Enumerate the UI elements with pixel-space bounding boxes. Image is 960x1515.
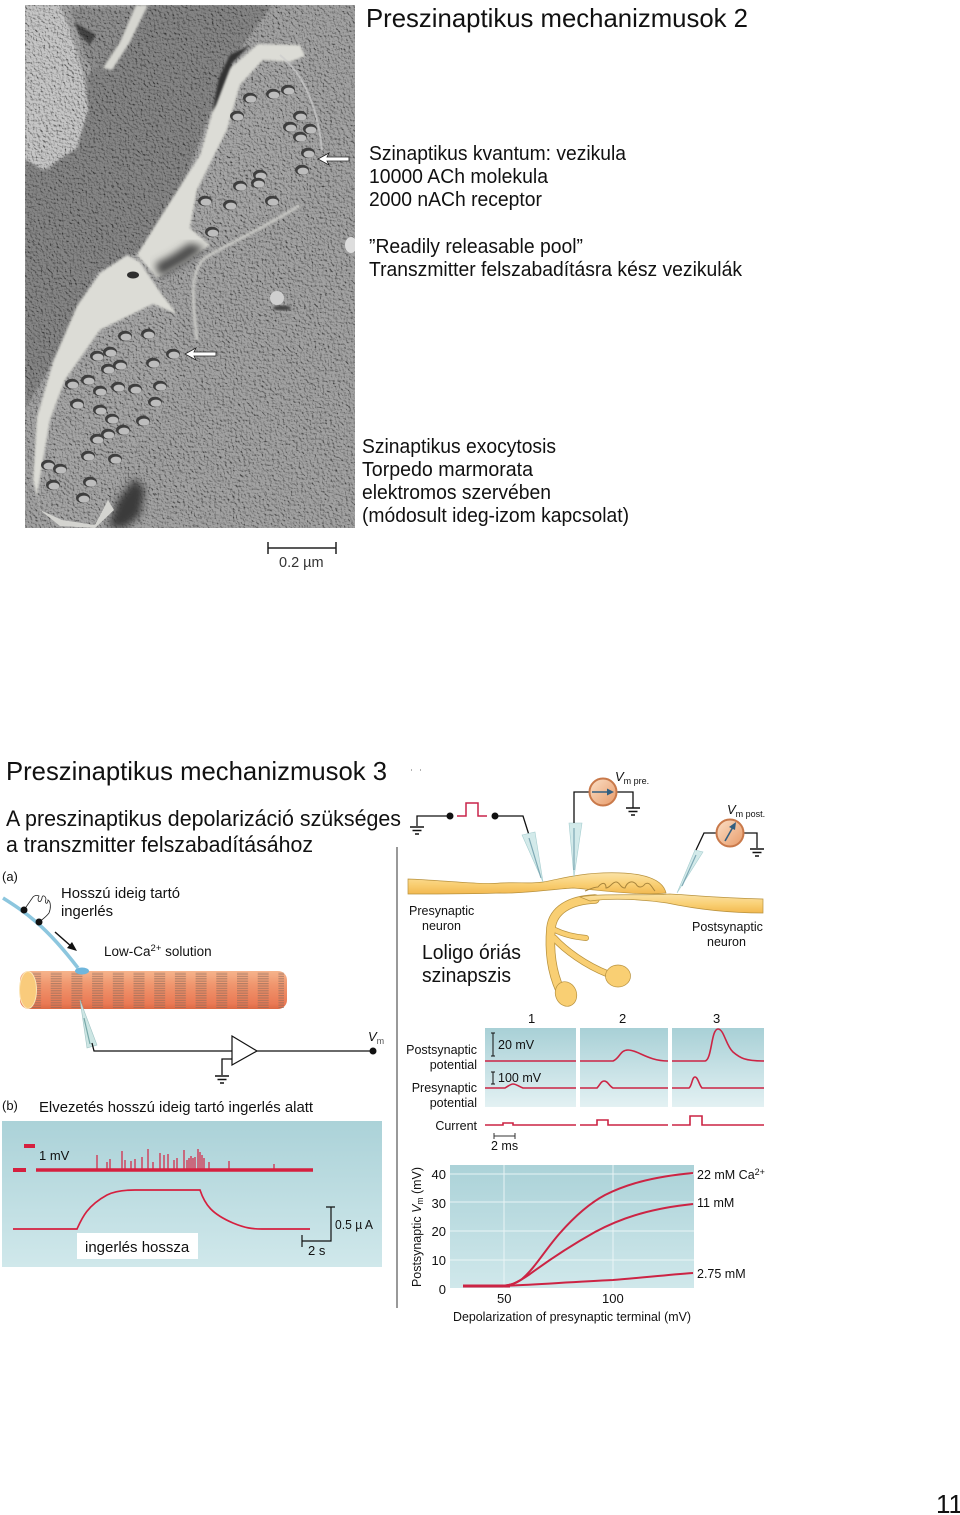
x ticks: 100 xyxy=(602,1291,624,1306)
amplifier circuit: V xyxy=(368,1029,377,1044)
panel b: recording during long stimulation xyxy=(2,1098,382,1267)
labels: neurons: Presynaptic xyxy=(409,904,474,918)
presynaptic voltmeter: m pre. xyxy=(624,776,649,786)
branches of postsynaptic neuron xyxy=(550,899,630,1009)
amplifier circuit: m xyxy=(377,1036,384,1046)
label: Loligo giant synapse: Loligo óriás xyxy=(422,942,521,964)
pipettes xyxy=(522,823,703,893)
y ticks: 30 xyxy=(432,1196,446,1211)
scale bars: 0.5 µ A xyxy=(335,1217,373,1232)
diagram: squid giant synapse xyxy=(408,769,765,1009)
row labels: potential xyxy=(430,1096,477,1110)
panel b: recording during long stimulation: Elvezetés hosszú ideig tartó ingerlés alatt xyxy=(39,1099,314,1116)
y axis label: Postsynaptic V xyxy=(409,1204,424,1287)
x ticks: 50 xyxy=(497,1291,511,1306)
label: low calcium solution: solution xyxy=(161,944,212,959)
pale upper-left cell xyxy=(25,5,88,170)
arrow: upper vesicle xyxy=(318,153,349,165)
column numbers xyxy=(528,1011,720,1026)
y ticks: 40 xyxy=(432,1167,446,1182)
curve labels: 2.75 mM xyxy=(697,1267,746,1281)
scale bar 0.2 um xyxy=(268,542,336,571)
y ticks: 20 xyxy=(432,1224,446,1239)
motor axon with stimulating electrodes xyxy=(3,895,89,974)
upper terminal base xyxy=(190,62,322,245)
label: long stimulation xyxy=(61,885,180,920)
panel a: experimental setup xyxy=(2,869,384,1083)
arrow: lower vesicle xyxy=(185,348,216,360)
x axis label: Depolarization of presynaptic terminal (mV) xyxy=(453,1309,691,1324)
text block: synaptic quantum: Szinaptikus kvantum: vezikula xyxy=(369,143,627,165)
text block: exocytosis caption xyxy=(362,436,629,527)
text block: depolarization needed: a transzmitter felszabadításához xyxy=(6,832,313,857)
amplifier circuit xyxy=(92,1029,384,1083)
labels: neurons: Postsynaptic xyxy=(692,920,763,934)
y axis label: (mV) xyxy=(409,1167,424,1197)
text block: synaptic quantum: 10000 ACh molekula xyxy=(369,166,549,188)
row labels: potential xyxy=(430,1058,477,1072)
text block: exocytosis caption: (módosult ideg-izom kapcsolat) xyxy=(362,505,629,527)
label: Loligo giant synapse xyxy=(422,942,521,987)
recording pipette xyxy=(80,1000,97,1048)
text block: depolarization needed xyxy=(6,806,401,857)
title: mechanisms 3: Preszinaptikus mechanizmusok 3 xyxy=(6,756,387,786)
text block: exocytosis caption: elektromos szervében xyxy=(362,482,551,504)
panel: micrograph of synaptic exocytosis xyxy=(25,5,357,528)
label: Loligo giant synapse: szinapszis xyxy=(422,965,511,987)
label box: stimulation length: ingerlés hossza xyxy=(85,1239,190,1256)
pale fracture band lower xyxy=(33,255,177,510)
noise overlay xyxy=(25,5,355,528)
y ticks: 10 xyxy=(432,1253,446,1268)
postsynaptic voltmeter: V xyxy=(727,802,736,817)
thin strip top xyxy=(103,5,148,70)
trace: miniature potentials xyxy=(13,1146,313,1170)
presynaptic and postsynaptic axons xyxy=(408,873,666,894)
text block: exocytosis caption: Szinaptikus exocytosis xyxy=(362,436,556,458)
text block: synaptic quantum: 2000 nACh receptor xyxy=(369,189,542,211)
labels: neurons: neuron xyxy=(707,935,746,949)
row labels: Current xyxy=(435,1119,478,1133)
row labels xyxy=(406,1043,478,1133)
pale fracture band upper xyxy=(137,44,305,278)
stimulating circuit xyxy=(410,803,529,835)
curve labels: 22 mM Ca xyxy=(697,1168,755,1182)
panel b: recording during long stimulation: (b) xyxy=(2,1098,18,1113)
label: long stimulation: Hosszú ideig tartó xyxy=(61,885,180,902)
text block: synaptic quantum xyxy=(369,143,627,211)
y ticks xyxy=(432,1167,446,1297)
chart: postsynaptic vs presynaptic depolarization xyxy=(409,1165,765,1324)
column numbers: 3 xyxy=(713,1011,720,1026)
label: low calcium solution: 2+ xyxy=(151,943,162,954)
column numbers: 1 xyxy=(528,1011,535,1026)
terminal rims xyxy=(193,205,300,340)
dark fracture region xyxy=(25,5,272,410)
row labels: Presynaptic xyxy=(412,1081,477,1095)
panel a: experimental setup: (a) xyxy=(2,869,18,884)
title: mechanisms 2: Preszinaptikus mechanizmusok 2 xyxy=(366,3,748,33)
panel b: recording during long stimulation: 1 mV xyxy=(39,1148,70,1163)
text block: readily releasable pool xyxy=(369,236,743,281)
scale bars xyxy=(491,1033,542,1153)
presynaptic voltmeter: V xyxy=(615,769,624,784)
chart: response traces 1-3 xyxy=(406,1011,764,1153)
trace: stimulus current xyxy=(13,1190,310,1229)
y axis label: m xyxy=(415,1197,425,1205)
vesicles upper terminal xyxy=(198,85,317,237)
curve labels: 11 mM xyxy=(697,1196,734,1210)
scale bars xyxy=(302,1207,373,1258)
label: low calcium solution: Low-Ca xyxy=(104,944,151,959)
y ticks: 0 xyxy=(439,1282,446,1297)
traces xyxy=(485,1029,764,1125)
scale bars: 100 mV xyxy=(498,1071,542,1085)
curve labels: 2+ xyxy=(755,1167,765,1177)
text block: readily releasable pool: Transzmitter felszabadításra kész vezikulák xyxy=(369,259,743,281)
row labels: Postsynaptic xyxy=(406,1043,477,1057)
muscle fibre xyxy=(20,971,287,1009)
lower terminal base xyxy=(37,304,183,525)
curve labels xyxy=(697,1167,765,1281)
text block: readily releasable pool: ”Readily releasable pool” xyxy=(369,236,583,258)
postsynaptic voltmeter xyxy=(696,802,765,856)
scale bar 0.2 um: 0.2 µm xyxy=(279,555,324,571)
postsynaptic voltmeter: m post. xyxy=(736,809,765,819)
curves: Ca concentrations xyxy=(463,1173,693,1286)
labels: neurons xyxy=(409,904,763,949)
column numbers: 2 xyxy=(619,1011,626,1026)
scale bars: 20 mV xyxy=(498,1038,535,1052)
x ticks xyxy=(497,1291,624,1306)
label: long stimulation: ingerlés xyxy=(61,903,113,920)
labels: neurons: neuron xyxy=(422,919,461,933)
label box: stimulation length xyxy=(77,1233,198,1259)
text block: depolarization needed: A preszinaptikus depolarizáció szükséges xyxy=(6,806,401,831)
text block: exocytosis caption: Torpedo marmorata xyxy=(362,459,534,481)
vesicles lower terminal xyxy=(41,329,180,503)
presynaptic voltmeter xyxy=(574,769,649,823)
scale bars: 2 ms xyxy=(491,1139,518,1153)
scale bars: 2 s xyxy=(308,1243,326,1258)
